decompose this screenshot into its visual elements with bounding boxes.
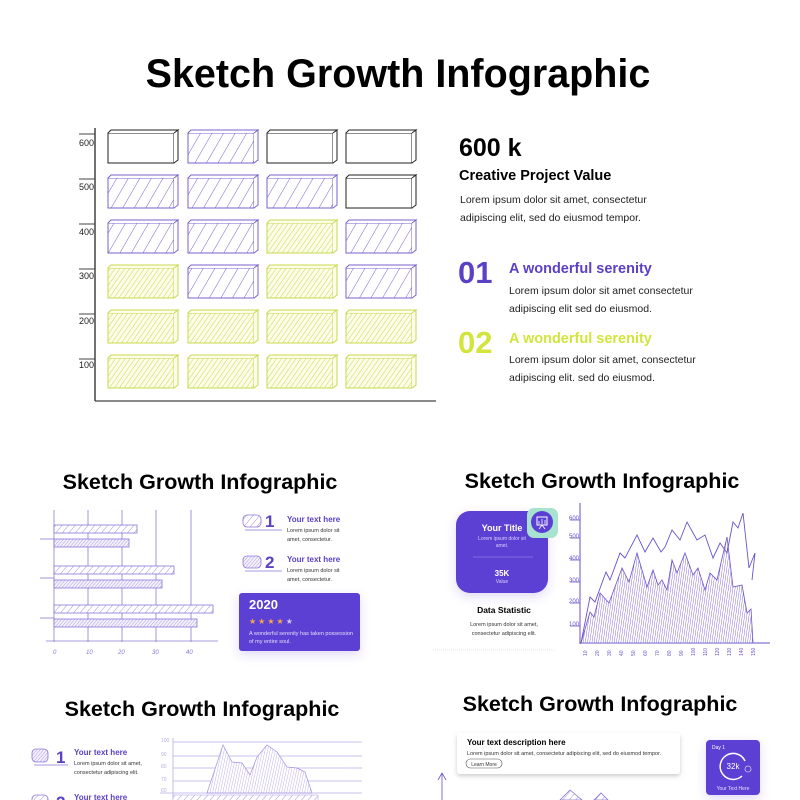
- legend: items 1 and 2: Lorem ipsum dolor sit: [287, 528, 340, 534]
- text block: data statistic: consectetur adipiscing elit.: [472, 631, 537, 637]
- card: 2020 rating: A wonderful serenity has taken possession: [249, 631, 353, 637]
- chart: hatched area with outline: 300: [569, 578, 580, 584]
- legend: items 1 and 2: Lorem ipsum dolor sit: [287, 568, 340, 574]
- text block: 600k value: Lorem ipsum dolor sit amet, consectetur: [460, 194, 647, 206]
- chart: hatched area with outline: 40: [619, 650, 625, 656]
- chart: 3D block grid: [79, 128, 436, 401]
- panel title: bottom-right 2: Sketch Growth Infographic: [463, 692, 737, 716]
- panel title: bottom-left 1: Sketch Growth Infographic: [63, 470, 337, 494]
- text block: 600k value: 600 k: [459, 134, 522, 162]
- chart: hatched area with outline: 100: [569, 622, 580, 628]
- card: 2020 rating: of my entire soul.: [249, 639, 291, 645]
- list item 02: A wonderful serenity: [509, 331, 652, 347]
- card: day 1 progress: Day 1: [712, 745, 725, 751]
- text block: 600k value: [459, 134, 647, 224]
- chart: mountain area: 70: [161, 777, 167, 783]
- chart: hatched area with outline: 140: [739, 647, 745, 656]
- chart: hatched area with outline: 150: [751, 647, 757, 656]
- legend: bottom-left items: 1: [56, 748, 65, 767]
- legend: items 1 and 2: 1: [265, 512, 274, 531]
- text block: 600k value: Creative Project Value: [459, 168, 611, 184]
- legend: items 1 and 2: [243, 512, 341, 583]
- chart: horizontal bars: [40, 510, 218, 656]
- card: text description: Learn More: [471, 762, 497, 768]
- legend: bottom-left items: consectetur adipiscing elit.: [74, 770, 139, 776]
- list item 01: Lorem ipsum dolor sit amet consectetur: [509, 285, 693, 297]
- row 200: [108, 310, 178, 343]
- card: your title: Your Title: [482, 523, 522, 533]
- card: text description: Your text description here: [467, 738, 566, 747]
- chart: mountain area: 90: [161, 752, 167, 758]
- chart: mountain area: 60: [161, 788, 167, 794]
- card: your title: [456, 511, 548, 593]
- card: 2020 rating: [239, 593, 360, 651]
- row 400: [108, 220, 178, 253]
- card: your title: 35K: [495, 569, 510, 578]
- chart: hatched area with outline: 10: [583, 650, 589, 656]
- legend: items 1 and 2: 2: [265, 553, 274, 572]
- arrow: up: [438, 773, 446, 800]
- chart: horizontal bars: 40: [186, 650, 193, 656]
- chart: hatched area with outline: 200: [569, 599, 580, 605]
- chart: hatched area with outline: 120: [715, 647, 721, 656]
- card: your title: amet.: [496, 543, 508, 549]
- card: your title: Lorem ipsum dolor sit: [478, 536, 527, 542]
- chart: 3D block grid: 100: [79, 360, 94, 370]
- chart: 3D block grid: 600: [79, 138, 94, 148]
- chart: hatched area with outline: 70: [655, 650, 661, 656]
- row 500: [108, 175, 178, 208]
- text block: 600k value: adipiscing elit, sed do eiusmod tempor.: [460, 212, 641, 224]
- chart: hatched area with outline: 60: [643, 650, 649, 656]
- panel title: bottom-right 1: Sketch Growth Infographic: [465, 469, 739, 493]
- card: 2020 rating: 2020: [249, 597, 278, 612]
- chart: hatched area with outline: 600: [569, 516, 580, 522]
- chart: 3D block grid: 300: [79, 271, 94, 281]
- card: day 1 progress: Your Text Here: [717, 786, 750, 792]
- list item 01: [458, 255, 693, 315]
- chart: hatched area with outline: 110: [703, 648, 709, 656]
- chart: 3D block grid: 400: [79, 227, 94, 237]
- list item 01: A wonderful serenity: [509, 261, 652, 277]
- icon: presentation board: [527, 508, 558, 538]
- legend: items 1 and 2: amet, consectetur.: [287, 537, 332, 543]
- card: day 1 progress: 32k: [727, 762, 740, 771]
- chart: mountain area: 100: [161, 738, 170, 744]
- chart: horizontal bars: 30: [152, 650, 159, 656]
- chart: hatched area with outline: 30: [607, 650, 613, 656]
- chart: hatched area with outline: 90: [679, 650, 685, 656]
- legend: items 1 and 2: Your text here: [287, 515, 341, 524]
- title: Sketch Growth Infographic: [146, 52, 650, 96]
- chart: small peaks: [560, 790, 608, 800]
- card: text description: [457, 733, 680, 774]
- chart: hatched area with outline: 80: [667, 650, 673, 656]
- text block: data statistic: Lorem ipsum dolor sit amet,: [470, 622, 538, 628]
- chart: 3D block grid: 200: [79, 316, 94, 326]
- row 600: [108, 130, 178, 163]
- legend: bottom-left items: [32, 748, 142, 800]
- chart: 3D block grid: 500: [79, 182, 94, 192]
- card: 2020 rating: ★★★★★: [249, 617, 295, 626]
- chart: hatched area with outline: 50: [631, 650, 637, 656]
- row 100: [108, 355, 178, 388]
- legend: items 1 and 2: amet, consectetur.: [287, 577, 332, 583]
- text block: data statistic: [433, 605, 555, 650]
- chart: mountain area: [160, 738, 362, 800]
- chart: hatched area with outline: 100: [691, 647, 697, 656]
- row 300: [108, 265, 178, 298]
- legend: items 1 and 2: Your text here: [287, 555, 341, 564]
- panel title: bottom-left 2: Sketch Growth Infographic: [65, 697, 339, 721]
- chart: hatched area with outline: 500: [569, 534, 580, 540]
- chart: hatched area with outline: 400: [569, 556, 580, 562]
- list item 01: adipiscing elit sed do eiusmod.: [509, 303, 652, 315]
- list item 01: 01: [458, 255, 492, 290]
- chart: hatched area with outline: 130: [727, 647, 733, 656]
- chart: mountain area: 80: [161, 764, 167, 770]
- chart: horizontal bars: 10: [86, 650, 93, 656]
- text block: data statistic: Data Statistic: [477, 605, 531, 615]
- legend: bottom-left items: Your text here: [74, 748, 128, 757]
- card: your title: Value: [496, 579, 508, 585]
- chart: horizontal bars: 20: [117, 650, 125, 656]
- chart: horizontal bars: 0: [53, 650, 57, 656]
- card: text description: Lorem ipsum dolor sit amet, consectetur adipiscing elit, sed do eiusmod tempor.: [467, 751, 662, 757]
- card: day 1 progress: [706, 740, 760, 795]
- list item 02: [458, 325, 696, 384]
- chart: hatched area with outline: [569, 503, 770, 656]
- legend: bottom-left items: Lorem ipsum dolor sit amet,: [74, 761, 142, 767]
- chart: hatched area with outline: 20: [595, 650, 601, 656]
- list item 02: adipiscing elit. sed do eiusmod.: [509, 372, 655, 384]
- list item 02: 02: [458, 325, 492, 360]
- list item 02: Lorem ipsum dolor sit amet, consectetur: [509, 354, 696, 366]
